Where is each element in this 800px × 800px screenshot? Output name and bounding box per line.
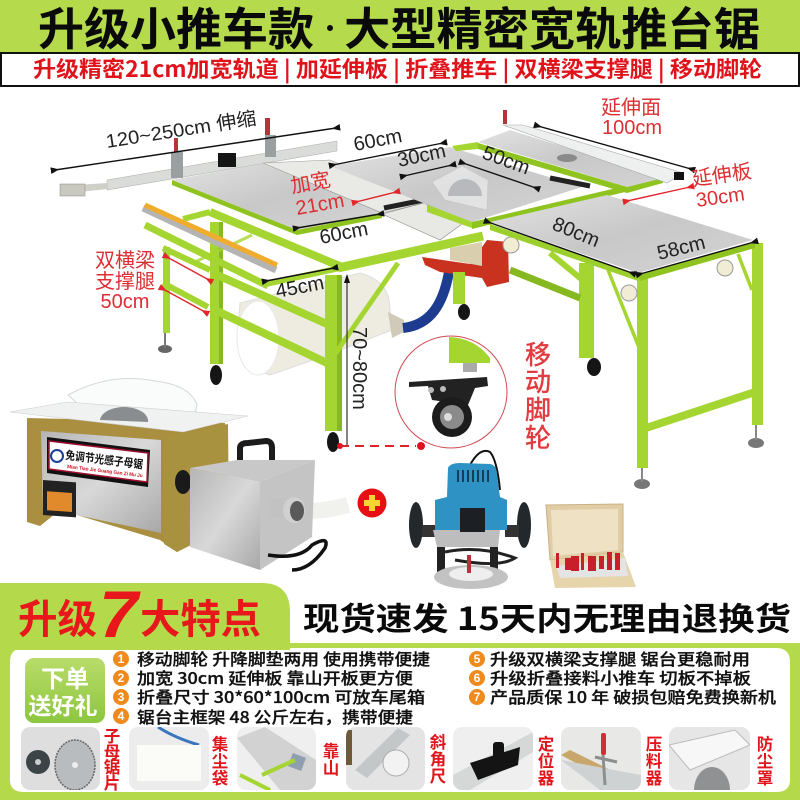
label: double cross beam: 50cm: [101, 291, 149, 313]
extension panel: [452, 110, 684, 193]
label: 80cm: [488, 213, 632, 273]
knob: [175, 470, 191, 494]
thumbnail: mitre gauge: [346, 727, 425, 790]
label: 70-80cm: 70~80cm: [348, 327, 370, 410]
dust extractor: [190, 441, 348, 570]
label: 60cm top: 60cm: [352, 125, 404, 156]
blade: [100, 407, 148, 422]
mini table saw: [10, 378, 248, 552]
left and centre legs: [163, 222, 763, 468]
feature list left: 2: [118, 671, 125, 685]
caster label: 移动脚轮: [525, 340, 551, 453]
thumbnail: clamp: [561, 727, 641, 790]
label: 58cm: [640, 232, 754, 274]
bottom feature panel: [0, 577, 800, 800]
gift badge: [25, 658, 105, 723]
label: 45cm: [266, 268, 334, 303]
plus icon: [358, 488, 386, 518]
label: extension surface: [538, 96, 691, 169]
thumbnail: dust bag: [129, 727, 209, 790]
front steel panel: [41, 431, 161, 533]
label: 120-250cm: [55, 107, 336, 170]
subtitle bar: 升级精密21cm加宽轨道 | 加延伸板 | 折叠推车 | 双横梁支撑腿 | 移动脚轮: [33, 52, 762, 84]
feature list left: [113, 646, 430, 728]
saw motor housing: [422, 240, 509, 287]
label: double cross beam: [95, 249, 209, 313]
gift badge: 下单: [41, 659, 89, 694]
feature list right: [469, 646, 776, 708]
router bit box: [546, 504, 636, 588]
label: double cross beam: 支撑腿: [95, 270, 155, 293]
label: 45cm: 45cm: [274, 272, 326, 303]
label: 60cm lower: [297, 214, 380, 249]
heading: seven features: [18, 577, 261, 651]
label: widen 21cm: [289, 168, 396, 220]
casters and feet: [158, 237, 764, 489]
feature list right: 升级折叠接料小推车 切板不掉板: [490, 665, 751, 689]
label: extension board: [627, 160, 753, 212]
thumbnail: positioner: [453, 727, 533, 790]
side face: [260, 460, 315, 570]
thumbnail: saw blades: [21, 727, 100, 790]
feature list right: 产品质保 10 年 破损包赔免费换新机: [490, 684, 776, 708]
feature list left: 加宽 30cm 延伸板 靠山开板更方便: [137, 665, 413, 689]
label: 120-250cm: 120~250cm 伸缩: [104, 107, 258, 153]
push table saw machine: [60, 110, 764, 489]
top plate: [190, 460, 315, 482]
feature list right: 5: [474, 652, 481, 666]
thumb label: 靠山: [323, 738, 339, 779]
carriage rails: [382, 200, 462, 240]
thumb label: 斜角尺: [430, 729, 447, 787]
frame bars: [145, 205, 755, 428]
centre table top: [330, 147, 625, 229]
caster callout: [340, 336, 551, 453]
thumbnail: rip fence: [237, 727, 316, 790]
front face: [190, 468, 260, 570]
outlet nozzle: [270, 497, 305, 523]
right table top: [490, 195, 755, 281]
blade guard: [68, 378, 197, 425]
table surface: [10, 402, 248, 432]
left table top: [172, 163, 382, 235]
label: widen 21cm: 加宽: [289, 168, 332, 198]
label: 58cm: 58cm: [655, 232, 708, 265]
warning label: [43, 480, 76, 517]
label: extension board: 延伸板: [690, 160, 753, 191]
feature list left: 移动脚轮 升降脚垫两用 使用携带便捷: [137, 646, 430, 670]
handle: [240, 441, 272, 465]
label: 70-80cm: [344, 274, 370, 445]
dust bag: [237, 273, 404, 375]
label: 30cm: 30cm: [395, 140, 448, 172]
saw blade and guard: [432, 166, 488, 210]
label: 50cm: [463, 142, 536, 188]
roller rail: [143, 205, 277, 270]
green frame: [0, 643, 800, 800]
feature list right: 7: [474, 690, 481, 704]
magnified caster: [395, 336, 507, 448]
label: extension board: 30cm: [695, 183, 746, 212]
gift badge: 送好礼: [28, 687, 98, 721]
heading: seven features: 大特点: [140, 587, 261, 645]
product nameplate: Mian Tiao Jie Guang Gan Zi Mu Ju: [67, 464, 143, 479]
label: extension surface: 100cm: [602, 117, 662, 139]
green tab: [0, 583, 290, 650]
blue hose: [403, 272, 449, 328]
product nameplate: [47, 437, 150, 487]
sliding rails: [263, 160, 428, 213]
thumbnail: dust guard: [669, 727, 750, 790]
dimension annotations: [55, 96, 754, 445]
label: 50cm: 50cm: [479, 142, 533, 179]
label: 60cm lower: 60cm: [318, 218, 370, 249]
heading: seven features: 7: [99, 577, 141, 651]
heading: seven features: 升级: [18, 587, 97, 645]
thumb label: 定位器: [538, 731, 555, 789]
router: [409, 451, 531, 589]
feature list right: 升级双横梁支撑腿 锯台更稳耐用: [490, 646, 750, 670]
title banner: [0, 0, 800, 58]
gold body: [27, 418, 229, 552]
feature list left: 4: [118, 709, 125, 723]
product nameplate: 免调节光感子母锯: [65, 447, 144, 473]
label: 80cm: 80cm: [549, 213, 603, 252]
label: double cross beam: 双横梁: [95, 249, 155, 272]
power cord: [268, 541, 326, 570]
thumb label: 防尘罩: [757, 731, 773, 789]
feature list right: 6: [474, 671, 481, 685]
label: extension surface: 延伸面: [601, 96, 661, 119]
feature list left: 1: [118, 652, 125, 666]
thumb label: 压料器: [646, 731, 663, 789]
thumb label: 集尘袋: [212, 731, 229, 789]
dashed leader: [340, 445, 416, 447]
white hose: [312, 505, 348, 511]
feature list left: 3: [118, 690, 125, 704]
leader dot: [417, 442, 425, 450]
left sliding fence: [60, 118, 337, 196]
feature list left: 折叠尺寸 30*60*100cm 可放车尾箱: [137, 684, 425, 708]
thumb label: 子母锯片: [104, 723, 120, 794]
heading: shipping and returns: 现货速发 15天内无理由退换货: [303, 594, 791, 640]
feature list left: 锯台主框架 48 公斤左右，携带便捷: [137, 704, 413, 728]
label: widen 21cm: 21cm: [294, 190, 346, 220]
label: 60cm top: [333, 125, 443, 165]
